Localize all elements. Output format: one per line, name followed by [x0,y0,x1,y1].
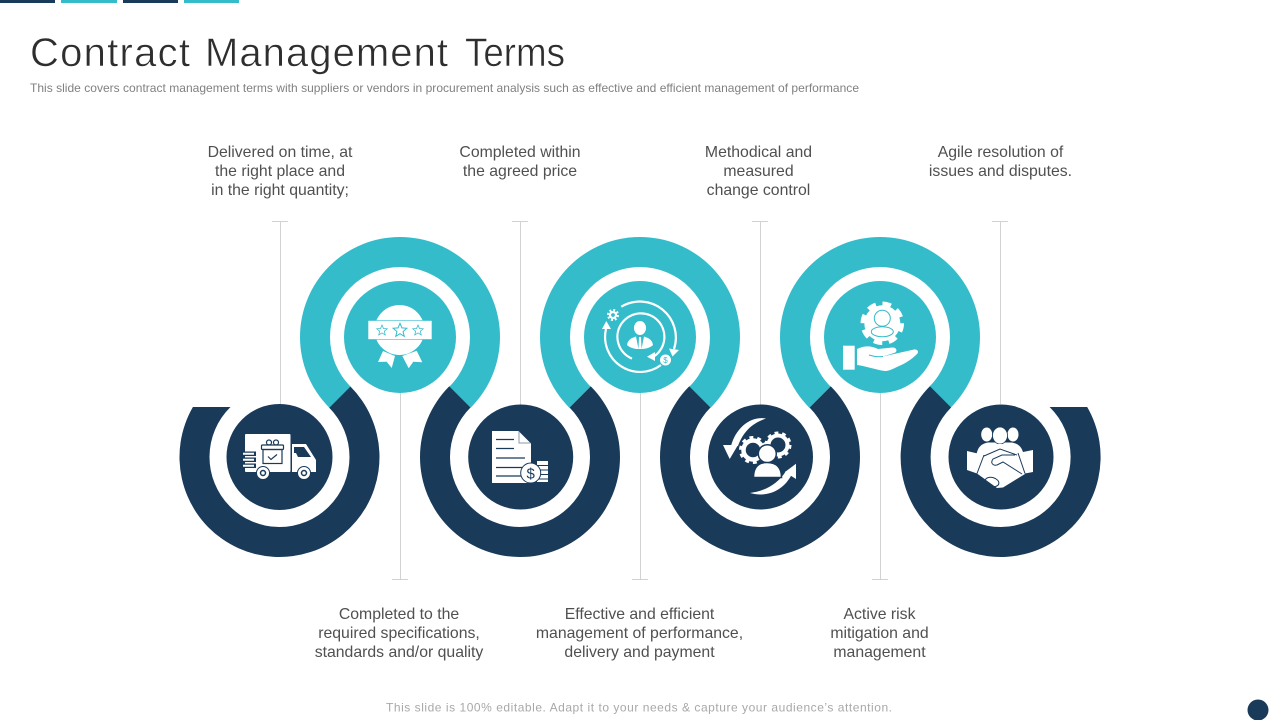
text: on time: in the right quantity; [211,182,349,199]
title: Terms [465,31,565,75]
text: performance: management of performance, [536,625,743,642]
text: change control: Methodical and [705,144,812,161]
title: Management [205,31,448,75]
text: disputes: issues and disputes. [929,163,1072,180]
icon: three-star award badge [344,281,456,393]
top accent bars [0,0,239,3]
corner dot [1248,700,1268,720]
footer note: This slide is 100% editable. Adapt it to your needs & capture your audience’s attention. [386,700,892,714]
text: change control: change control [707,182,810,199]
text: specifications: standards and/or quality [315,644,483,661]
icon: person with cycle arrows [584,281,696,393]
text: specifications [315,606,483,661]
ring: teal 1 [300,237,500,408]
text: disputes [929,144,1072,180]
text: on time: Delivered on time, at [208,144,353,161]
title: Contract [30,31,190,75]
icon: person with cycle arrows: $ [663,356,668,365]
text: risk [830,606,929,661]
text: agreed price [459,144,581,180]
text: agreed price: Completed within [459,144,581,161]
text: risk: mitigation and [830,625,929,642]
ring: teal 3 [780,237,980,408]
icon: delivery truck [226,404,332,510]
text: change control: measured [723,163,794,180]
text: change control [705,144,812,199]
text: performance: delivery and payment [564,644,715,661]
icon: hand holding gear with person [824,281,936,393]
icon: handshake and team [948,404,1054,510]
text: on time [208,144,353,199]
text: performance: Effective and efficient [565,606,715,623]
text: risk: Active risk [844,606,916,623]
icon: gears, person and change arrows [708,404,813,510]
text: on time: the right place and [215,163,345,180]
ring: teal 2 [540,237,740,408]
text: specifications: Completed to the [339,606,459,623]
icon: invoice document with coins [468,404,573,510]
text: disputes: Agile resolution of [938,144,1064,161]
subtitle: This slide covers contract management terms with suppliers or vendors in procurement analysis such as effective and efficient management of performance [30,81,859,95]
ring: navy 2 [420,386,620,557]
ring: navy 3 [660,386,860,557]
text: agreed price: the agreed price [463,163,577,180]
ring: navy 1 [179,386,379,557]
text: specifications: required specifications, [318,625,480,642]
text: risk: management [833,644,926,661]
text: performance [536,606,743,661]
icon: invoice document with coins: $ [527,466,536,482]
title [30,31,565,75]
ring: navy 4 [901,386,1101,557]
